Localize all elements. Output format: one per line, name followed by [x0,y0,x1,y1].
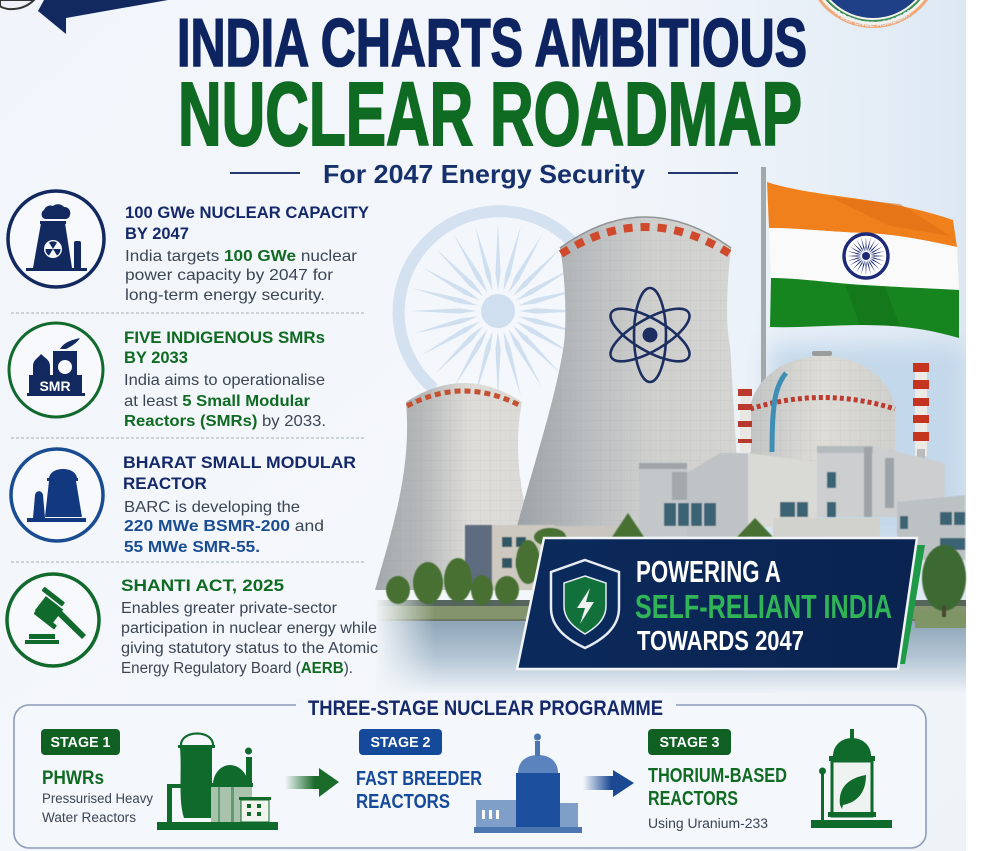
feature: five indigenous SMRs: at least 5 Small Modular [124,393,310,410]
large cooling tower [516,217,741,530]
logo top right: A DEFENCE ACADEMY [834,10,910,27]
flag pole [761,167,766,385]
feature: 100 GWe capacity: power capacity by 2047 for [125,267,334,284]
banner: powering a self-reliant india: SELF-RELIANT INDIA [635,588,892,625]
subtitle: For 2047 Energy Security [323,159,646,189]
feature: five indigenous SMRs: BY 2033 [124,349,188,367]
feature: bharat small modular reactor: BARC is developing the [124,499,300,516]
feature: shanti act: Energy Regulatory Board (AERB). [121,660,353,677]
stage 3: STAGE 3 [660,735,720,751]
river and bank [375,600,966,693]
stage 3 [648,729,892,831]
panel heading: THREE-STAGE NUCLEAR PROGRAMME [308,697,663,720]
logo top right [818,0,928,28]
banner: powering a self-reliant india [517,538,925,669]
feature: shanti act [7,574,378,677]
feature: five indigenous SMRs [9,323,326,430]
striped stacks [738,363,929,495]
icon: PHWR plant [157,734,278,830]
stage 2: FAST BREEDER [356,768,482,790]
trees [386,513,966,617]
banner: powering a self-reliant india: TOWARDS 2047 [637,625,804,656]
stage 3: THORIUM-BASED [648,765,787,787]
stage 3: REACTORS [648,788,738,810]
ribbon badge top left [0,0,168,34]
stage 1 [41,729,278,830]
stage 2: REACTORS [356,791,450,813]
stage 1: STAGE 1 [50,735,110,751]
icon: fast breeder plant [474,734,582,833]
feature: shanti act: giving statutory status to the Atomic [121,640,378,657]
icon: reactor [11,449,103,541]
ashoka chakra background wheel [399,211,586,399]
icon: cooling tower [8,191,104,287]
feature: 100 GWe capacity: BY 2047 [125,225,189,243]
icon: thorium reactor with leaf [811,729,892,828]
stage 2: STAGE 2 [370,735,430,751]
stage 2 [356,729,582,833]
feature: bharat small modular reactor [11,449,356,556]
atom symbol [603,288,697,382]
arrow: stage 2 to 3 [583,770,634,797]
feature: bharat small modular reactor: 55 MWe SMR-55. [124,539,260,556]
feature: bharat small modular reactor: 220 MWe BSMR-200 and [124,518,324,535]
feature: 100 GWe capacity [8,191,369,304]
icon: shield [551,560,619,648]
arrow: stage 1 to 2 [285,768,339,797]
banner: powering a self-reliant india: POWERING A [636,554,781,589]
stage 3: Using Uranium-233 [648,816,768,831]
feature: five indigenous SMRs: Reactors (SMRs) by 2033. [124,413,326,430]
icon: SMR: SMR [39,378,71,394]
indian flag [767,182,959,338]
feature: shanti act: participation in nuclear energy while [121,620,377,637]
reactor buildings [465,446,965,590]
icon: gavel [7,574,99,666]
feature: 100 GWe capacity: long-term energy security. [125,287,325,304]
title [177,5,807,165]
feature: 100 GWe capacity: India targets 100 GWe nuclear [125,248,358,265]
feature: shanti act: Enables greater private-sector [121,600,337,617]
reactor dome [750,351,895,465]
icon: SMR [9,323,103,417]
feature: five indigenous SMRs: FIVE INDIGENOUS SMRs [124,329,325,347]
panel: three-stage nuclear programme [14,697,926,848]
small cooling tower [375,383,532,590]
stage 1: PHWRs [42,768,104,789]
feature: bharat small modular reactor: REACTOR [123,474,207,493]
feature: five indigenous SMRs: India aims to operationalise [124,372,325,389]
stage 1: Pressurised Heavy [42,791,153,806]
feature: 100 GWe capacity: 100 GWe NUCLEAR CAPACITY [125,204,369,222]
feature: bharat small modular reactor: BHARAT SMALL MODULAR [123,453,356,472]
stage 1: Water Reactors [42,810,136,825]
feature: shanti act: SHANTI ACT, 2025 [121,576,284,595]
